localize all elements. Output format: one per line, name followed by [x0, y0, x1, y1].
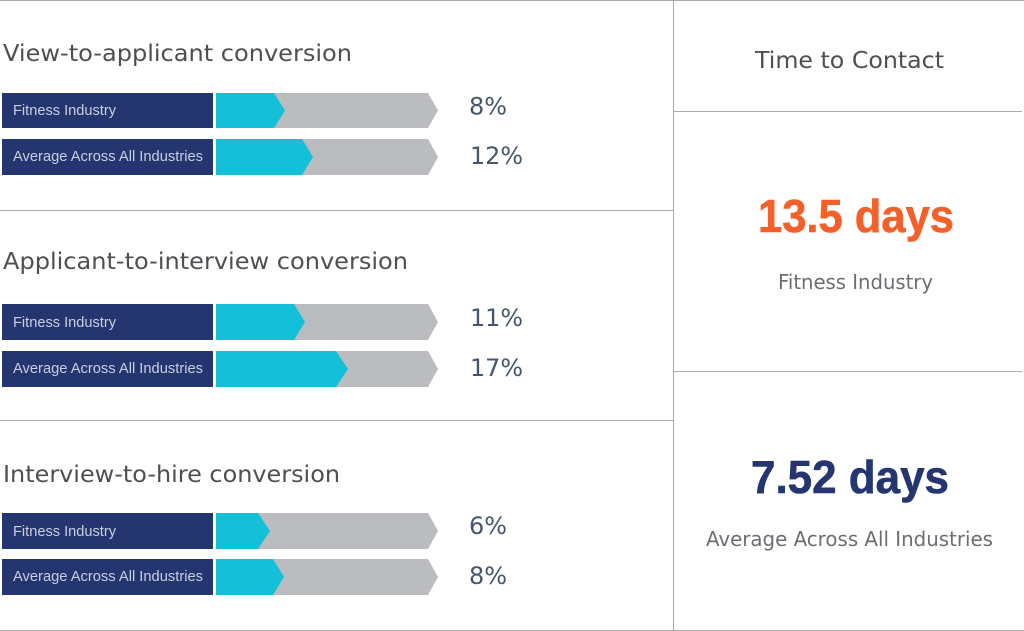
- bar: fitness industry 11%: 11%: [470, 304, 523, 332]
- stat: fitness industry 13.5 days: 13.5 days: [758, 190, 954, 242]
- heading: view-to-applicant: View-to-applicant conversion: [3, 41, 352, 67]
- bar: fitness industry 6%: 6%: [469, 512, 507, 540]
- bar: fitness industry 6%: [2, 512, 507, 549]
- bar: fitness industry 8%: Fitness Industry: [13, 103, 117, 119]
- panel: time to contact: [706, 48, 993, 551]
- heading: applicant-to-interview: Applicant-to-interview conversion: [3, 249, 408, 275]
- panel: applicant-to-interview conversion: [2, 249, 523, 387]
- bar: average 17%: Average Across All Industries: [13, 361, 203, 377]
- stat: fitness industry 13.5 days: [758, 190, 954, 294]
- bar: fitness industry 8%: 8%: [469, 92, 507, 120]
- stat: average 7.52 days: 7.52 days: [751, 451, 949, 503]
- heading: time to contact: Time to Contact: [754, 48, 944, 74]
- bar: average 8%: Average Across All Industries: [13, 569, 203, 585]
- bar: fitness industry 8%: [2, 92, 507, 128]
- bar: fitness industry 11%: [2, 304, 523, 340]
- bar: average 12%: Average Across All Industries: [13, 149, 203, 165]
- bar: fitness industry 6%: Fitness Industry: [13, 524, 117, 540]
- panel: view-to-applicant conversion: [2, 41, 523, 175]
- bar: average 12%: 12%: [470, 142, 523, 170]
- bar: average 17%: [2, 351, 523, 387]
- stat: fitness industry 13.5 days: Fitness Industry: [778, 270, 933, 294]
- bar: average 8%: [2, 559, 507, 595]
- heading: interview-to-hire: Interview-to-hire conversion: [3, 462, 340, 488]
- panel: interview-to-hire conversion: [2, 462, 507, 595]
- bar: average 8%: 8%: [469, 562, 507, 590]
- stat: average 7.52 days: [706, 451, 993, 551]
- bar: fitness industry 11%: Fitness Industry: [13, 315, 117, 331]
- bar: average 12%: [2, 139, 523, 175]
- stat: average 7.52 days: Average Across All Industries: [706, 527, 993, 551]
- bar: average 17%: 17%: [470, 354, 523, 382]
